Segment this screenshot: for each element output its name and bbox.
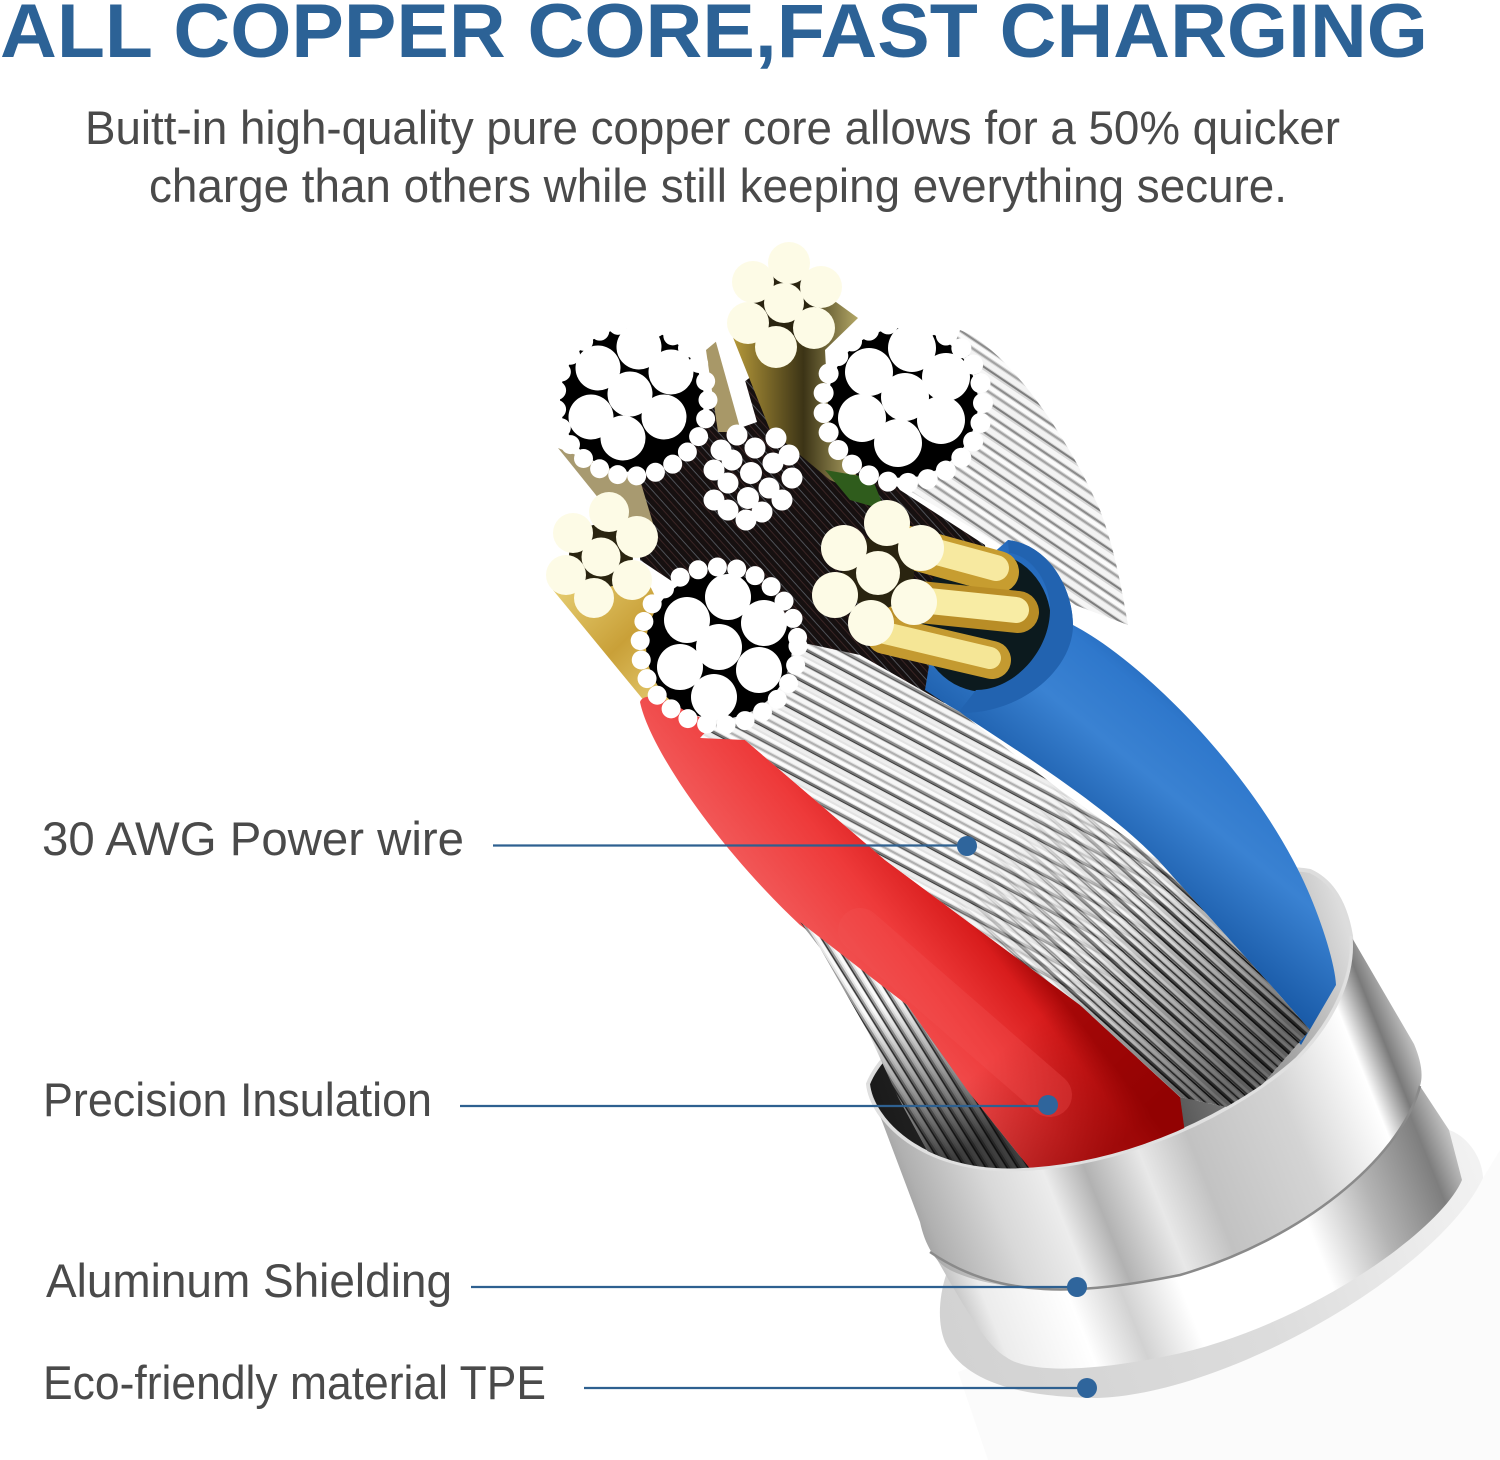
white gap strip [714, 335, 757, 428]
lower aluminum ring [926, 1086, 1462, 1369]
blue wire opening [919, 540, 1073, 713]
upper gold wire [732, 265, 875, 500]
callout: power wire [42, 812, 977, 865]
copper strands left [546, 492, 658, 618]
cross-section: shielded wire right [823, 323, 983, 483]
sheath flange [940, 1130, 1483, 1398]
cross-section: shielded wire bottom [640, 567, 798, 725]
red insulated wire [640, 696, 1190, 1172]
blue insulated wire [925, 540, 1336, 1045]
red wire highlight [860, 930, 1050, 1095]
callout: aluminum shielding: Aluminum Shielding [46, 1254, 452, 1307]
copper strands right [812, 500, 944, 646]
subtitle text block [85, 101, 1340, 212]
callout: TPE material [43, 1356, 1097, 1409]
subtitle text block: Buitt-in high-quality pure copper core allows for a 50% quicker [85, 101, 1340, 154]
callout: aluminum shielding [46, 1254, 1087, 1307]
lower left silver bundle [800, 922, 1035, 1175]
white TPE sheath [958, 1150, 1500, 1460]
cross-section: shielded wire left [556, 324, 708, 476]
red wire shading [800, 925, 1190, 1172]
gold conductor strands [885, 542, 1018, 660]
callout: power wire: 30 AWG Power wire [42, 812, 464, 865]
dark core interior [640, 340, 1000, 705]
copper strands top [727, 242, 842, 368]
callout: precision insulation [43, 1073, 1058, 1126]
gold strip beside gap [706, 340, 745, 432]
upper aluminum ring [868, 936, 1422, 1289]
left silver strip [558, 448, 655, 530]
cable illustration [546, 242, 1500, 1460]
twisted silver bundle [700, 640, 1310, 1110]
ring groove [930, 1086, 1420, 1289]
subtitle text block: charge than others while still keeping everything secure. [149, 159, 1287, 212]
left gold wire [553, 565, 705, 708]
green wire segment [825, 470, 885, 510]
ring lip highlight [868, 936, 1352, 1170]
upper silver bundle [900, 330, 1128, 625]
callout: precision insulation: Precision Insulation [43, 1073, 432, 1126]
ring inside [868, 869, 1352, 1170]
callout: TPE material: Eco-friendly material TPE [43, 1356, 546, 1409]
center thin strands [704, 424, 802, 530]
